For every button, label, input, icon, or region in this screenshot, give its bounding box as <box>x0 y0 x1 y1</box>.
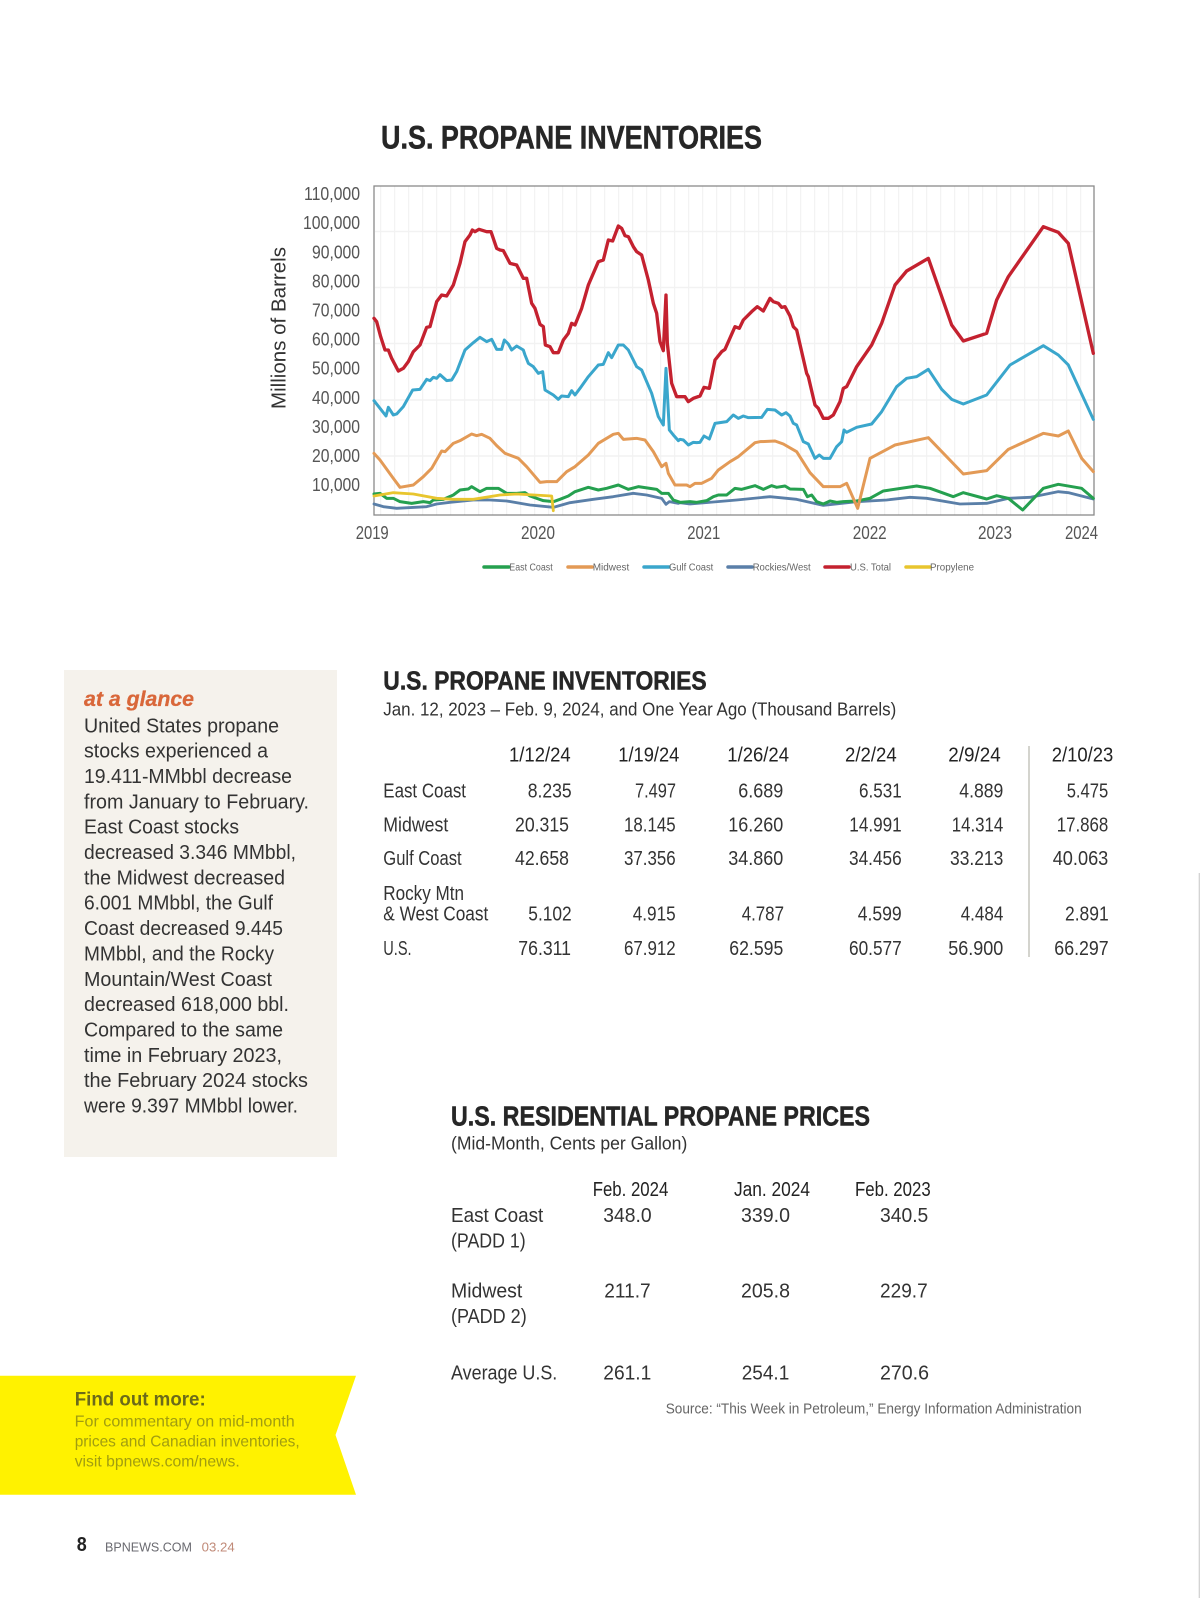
row: East Coast: 7.497 <box>635 781 676 803</box>
table: residential prices <box>451 1179 931 1384</box>
row: U.S.: 66.297 <box>1054 938 1109 960</box>
sidebar body text: the February 2024 stocks <box>84 1070 308 1092</box>
row: U.S. <box>383 938 1109 960</box>
series: Gulf Coast <box>374 337 1093 458</box>
sidebar body text: Mountain/West Coast <box>84 969 272 991</box>
source note: Source: “This Week in Petroleum,” Energy Information Administration <box>666 1401 1082 1417</box>
row: Average U.S. prices: 254.1 <box>742 1362 789 1384</box>
y axis labels: 60,000 <box>312 330 360 350</box>
x axis labels: 2021 <box>687 523 720 543</box>
legend: Gulf Coast <box>669 562 713 574</box>
row: East Coast: 4.889 <box>959 781 1003 803</box>
row: Midwest prices <box>451 1281 928 1328</box>
row: Gulf Coast: 37.356 <box>624 848 676 870</box>
row: U.S.: U.S. <box>383 938 412 960</box>
y axis labels: 70,000 <box>312 300 360 320</box>
row: Midwest: 17.868 <box>1057 815 1108 837</box>
x axis labels: 2023 <box>978 523 1012 543</box>
x axis labels: 2022 <box>853 523 887 543</box>
sidebar body text: stocks experienced a <box>84 741 269 763</box>
row: Gulf Coast: Gulf Coast <box>383 848 462 870</box>
callout body text <box>75 1414 300 1471</box>
sidebar body text: decreased 618,000 bbl. <box>84 994 289 1016</box>
row: Midwest prices: 229.7 <box>880 1281 928 1303</box>
legend: Propylene <box>930 562 974 574</box>
row: Rocky Mtn and West Coast: 4.787 <box>742 904 784 926</box>
sidebar body text: 19.411-MMbbl decrease <box>84 766 292 788</box>
row: Midwest prices: 205.8 <box>741 1281 790 1303</box>
row: East Coast: 5.475 <box>1067 781 1108 803</box>
series: Propylene <box>374 493 553 511</box>
row: Rocky Mtn and West Coast: & West Coast <box>383 904 489 926</box>
y axis labels <box>303 184 360 495</box>
sidebar body text: Coast decreased 9.445 <box>84 918 283 940</box>
callout body text: For commentary on mid-month <box>75 1414 295 1431</box>
sidebar heading: at a glance <box>84 688 194 711</box>
row: East Coast: 6.531 <box>859 781 902 803</box>
y axis labels: 20,000 <box>312 446 360 466</box>
sidebar body text: 6.001 MMbbl, the Gulf <box>84 893 273 915</box>
row: Gulf Coast: 40.063 <box>1053 848 1108 870</box>
table header row: 2/10/23 <box>1052 745 1113 767</box>
row: U.S.: 60.577 <box>849 938 902 960</box>
y axis labels: 30,000 <box>312 417 360 437</box>
row: Midwest: 14.314 <box>952 815 1003 837</box>
subheading: residential prices table: (Mid-Month, Cents per Gallon) <box>451 1133 687 1153</box>
row: Rocky Mtn and West Coast: 2.891 <box>1065 904 1109 926</box>
row: Rocky Mtn and West Coast: 4.484 <box>961 904 1003 926</box>
row: Midwest: 18.145 <box>624 815 676 837</box>
row: East Coast prices: (PADD 1) <box>451 1230 526 1252</box>
footer: page number and site: 03.24 <box>202 1540 235 1555</box>
sidebar body text: from January to February. <box>84 791 309 813</box>
table: inventories <box>383 745 1113 960</box>
row: East Coast: 8.235 <box>528 781 572 803</box>
row: Gulf Coast: 34.860 <box>728 848 783 870</box>
x axis labels: 2019 <box>356 523 389 543</box>
footer: page number and site: BPNEWS.COM <box>105 1540 192 1555</box>
footer: page number and site <box>77 1534 235 1556</box>
panel: at a glance sidebar <box>64 670 337 1157</box>
sidebar body text: Compared to the same <box>84 1020 283 1042</box>
price table header row: Jan. 2024 <box>734 1179 810 1201</box>
row: Midwest: 16.260 <box>728 815 783 837</box>
row: Gulf Coast: 33.213 <box>950 848 1003 870</box>
heading: residential prices table: U.S. RESIDENTIAL PROPANE PRICES <box>451 1101 870 1132</box>
table header row: 1/26/24 <box>727 745 789 767</box>
row: East Coast: 6.689 <box>738 781 783 803</box>
row: Midwest prices: Midwest <box>451 1281 523 1303</box>
legend: Midwest <box>593 562 630 574</box>
table header row: 2/2/24 <box>845 745 897 767</box>
table header row <box>509 745 1113 767</box>
row: Midwest: Midwest <box>383 815 449 837</box>
row: U.S.: 76.311 <box>518 938 571 960</box>
row: Rocky Mtn and West Coast <box>383 883 1109 926</box>
row: Rocky Mtn and West Coast: 4.599 <box>858 904 902 926</box>
table header row: 1/12/24 <box>509 745 571 767</box>
callout: find out more banner <box>0 1376 356 1495</box>
row: Midwest <box>383 815 1108 837</box>
row: East Coast prices: 348.0 <box>603 1205 652 1227</box>
y axis labels: 90,000 <box>312 242 360 262</box>
callout body text: prices and Canadian inventories, <box>75 1434 300 1451</box>
row: Rocky Mtn and West Coast: Rocky Mtn <box>383 883 464 905</box>
y axis title: Millions of Barrels <box>269 247 291 409</box>
row: Midwest prices: (PADD 2) <box>451 1306 527 1328</box>
x axis labels: 2020 <box>521 523 555 543</box>
row: Average U.S. prices <box>451 1362 929 1384</box>
sidebar body text: the Midwest decreased <box>84 867 285 889</box>
sidebar body text: decreased 3.346 MMbbl, <box>84 842 296 864</box>
series: Rockies/West <box>374 492 1093 508</box>
heading: inventories table: U.S. PROPANE INVENTORIES <box>383 665 707 695</box>
sidebar body text: time in February 2023, <box>84 1045 282 1067</box>
y axis labels: 10,000 <box>312 475 360 495</box>
price table header row: Feb. 2023 <box>855 1179 931 1201</box>
row: Average U.S. prices: Average U.S. <box>451 1362 557 1384</box>
callout body text: visit bpnews.com/news. <box>75 1454 240 1471</box>
x axis labels <box>356 523 1098 543</box>
row: Rocky Mtn and West Coast: 5.102 <box>528 904 572 926</box>
price table header row: Feb. 2024 <box>593 1179 668 1201</box>
sidebar body text <box>83 715 309 1118</box>
sidebar body text: United States propane <box>84 715 279 737</box>
panel: line chart of inventories <box>269 184 1098 574</box>
footer: page number and site: 8 <box>77 1534 87 1556</box>
row: East Coast prices <box>451 1205 928 1252</box>
row: Midwest: 20.315 <box>515 815 569 837</box>
row: U.S.: 67.912 <box>624 938 676 960</box>
title: chart heading: U.S. PROPANE INVENTORIES <box>381 120 762 156</box>
legend: U.S. Total <box>850 562 891 574</box>
row: Rocky Mtn and West Coast: 4.915 <box>633 904 676 926</box>
y axis labels: 100,000 <box>303 213 360 233</box>
table header row: 1/19/24 <box>618 745 679 767</box>
row: Average U.S. prices: 261.1 <box>603 1362 651 1384</box>
y axis labels: 50,000 <box>312 359 360 379</box>
y axis labels: 80,000 <box>312 271 360 291</box>
series: U.S. Total <box>374 226 1093 418</box>
row: U.S.: 56.900 <box>948 938 1003 960</box>
row: East Coast prices: 339.0 <box>741 1205 790 1227</box>
row: Midwest prices: 211.7 <box>604 1281 651 1303</box>
row: Gulf Coast: 34.456 <box>849 848 902 870</box>
price table header row <box>593 1179 931 1201</box>
subheading: inventories table: Jan. 12, 2023 – Feb. 9, 2024, and One Year Ago (Thousand Barrels) <box>383 700 896 720</box>
sidebar body text: were 9.397 MMbbl lower. <box>83 1096 298 1118</box>
row: U.S.: 62.595 <box>729 938 783 960</box>
row: East Coast prices: East Coast <box>451 1205 544 1227</box>
row: Gulf Coast: 42.658 <box>515 848 569 870</box>
y axis labels: 110,000 <box>304 184 360 204</box>
x axis labels: 2024 <box>1065 523 1098 543</box>
table header row: 2/9/24 <box>948 745 1001 767</box>
y axis labels: 40,000 <box>312 388 360 408</box>
row: Gulf Coast <box>383 848 1108 870</box>
sidebar body text: East Coast stocks <box>84 817 239 839</box>
row: East Coast <box>383 781 1108 803</box>
row: East Coast prices: 340.5 <box>880 1205 928 1227</box>
legend <box>484 562 974 574</box>
row: Average U.S. prices: 270.6 <box>880 1362 929 1384</box>
legend: East Coast <box>509 562 553 574</box>
series: Midwest <box>374 431 1093 508</box>
legend: Rockies/West <box>753 562 811 574</box>
row: East Coast: East Coast <box>383 781 466 803</box>
chart plot area <box>374 186 1094 515</box>
callout heading: Find out more: <box>75 1390 206 1411</box>
series: East Coast <box>374 484 1093 510</box>
row: Midwest: 14.991 <box>849 815 902 837</box>
sidebar body text: MMbbl, and the Rocky <box>84 943 274 965</box>
